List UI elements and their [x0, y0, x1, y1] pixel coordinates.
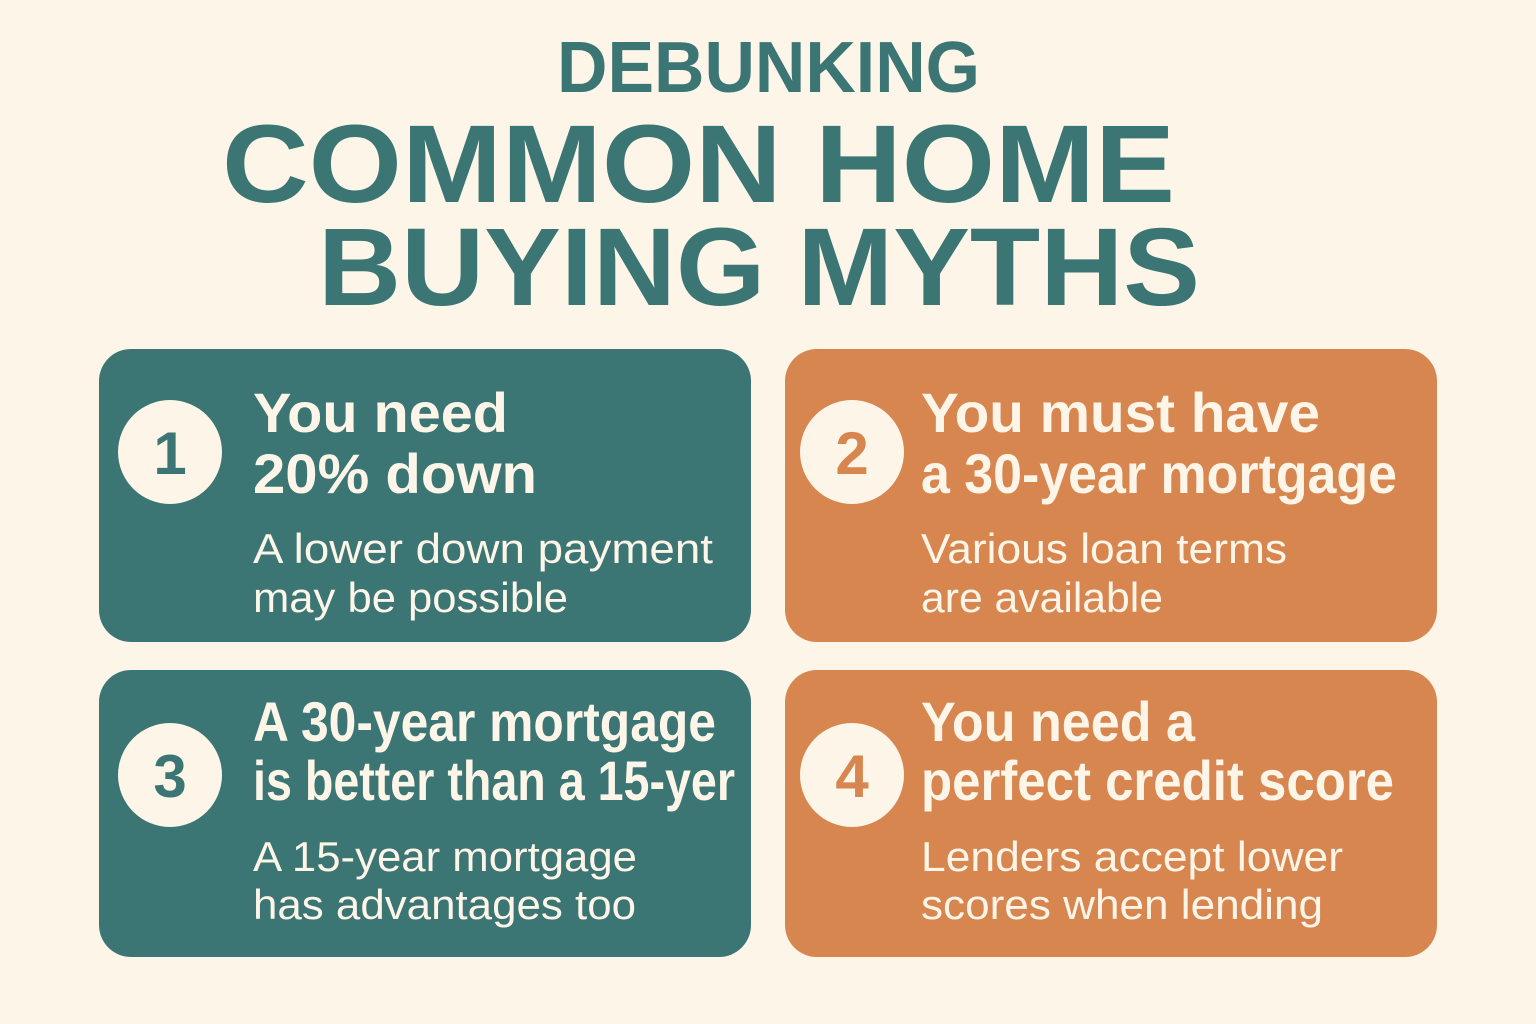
icon: number 2: 2: [835, 420, 869, 487]
text: fact 2: Various loan terms: [921, 525, 1287, 572]
panel: myth 4: [785, 670, 1437, 957]
title: BUYING MYTHS: [318, 206, 1200, 329]
heading: myth 1: You need: [253, 381, 508, 444]
heading: myth 4: You need a: [921, 690, 1196, 753]
heading: myth 2: You must have: [921, 381, 1320, 444]
heading: myth 2: [921, 381, 1397, 505]
icon: number 2: [800, 400, 904, 504]
title: DEBUNKING: [557, 28, 980, 108]
heading: myth 4: [921, 690, 1394, 812]
text: fact 2: [921, 525, 1287, 621]
text: fact 1: A lower down payment: [253, 525, 713, 572]
text: fact 3: [253, 833, 637, 928]
heading: myth 3: A 30-year mortgage: [253, 690, 716, 753]
icon: number 3: 3: [153, 743, 187, 810]
heading: myth 3: is better than a 15-yer: [253, 749, 735, 812]
text: fact 3: A 15-year mortgage: [253, 833, 637, 880]
icon: number 4: [800, 723, 904, 827]
title: [222, 28, 1200, 329]
text: fact 3: has advantages too: [253, 881, 636, 928]
icon: number 4: 4: [835, 743, 869, 810]
panel: myth 1: [99, 349, 751, 642]
heading: myth 3: [253, 690, 735, 812]
heading: myth 4: perfect credit score: [921, 749, 1394, 812]
text: fact 4: [921, 833, 1343, 928]
panel: myth 3: [99, 670, 751, 957]
text: fact 4: scores when lending: [921, 881, 1323, 928]
heading: myth 1: [253, 381, 537, 505]
heading: myth 1: 20% down: [253, 442, 537, 505]
text: fact 2: are available: [921, 574, 1163, 621]
panel: myth 2: [785, 349, 1437, 642]
icon: number 1: [118, 400, 222, 504]
text: fact 1: [253, 525, 713, 621]
text: fact 4: Lenders accept lower: [921, 833, 1343, 880]
heading: myth 2: a 30-year mortgage: [921, 442, 1397, 505]
icon: number 1: 1: [153, 420, 187, 487]
text: fact 1: may be possible: [253, 574, 568, 621]
icon: number 3: [118, 723, 222, 827]
title: COMMON HOME: [222, 103, 1175, 226]
